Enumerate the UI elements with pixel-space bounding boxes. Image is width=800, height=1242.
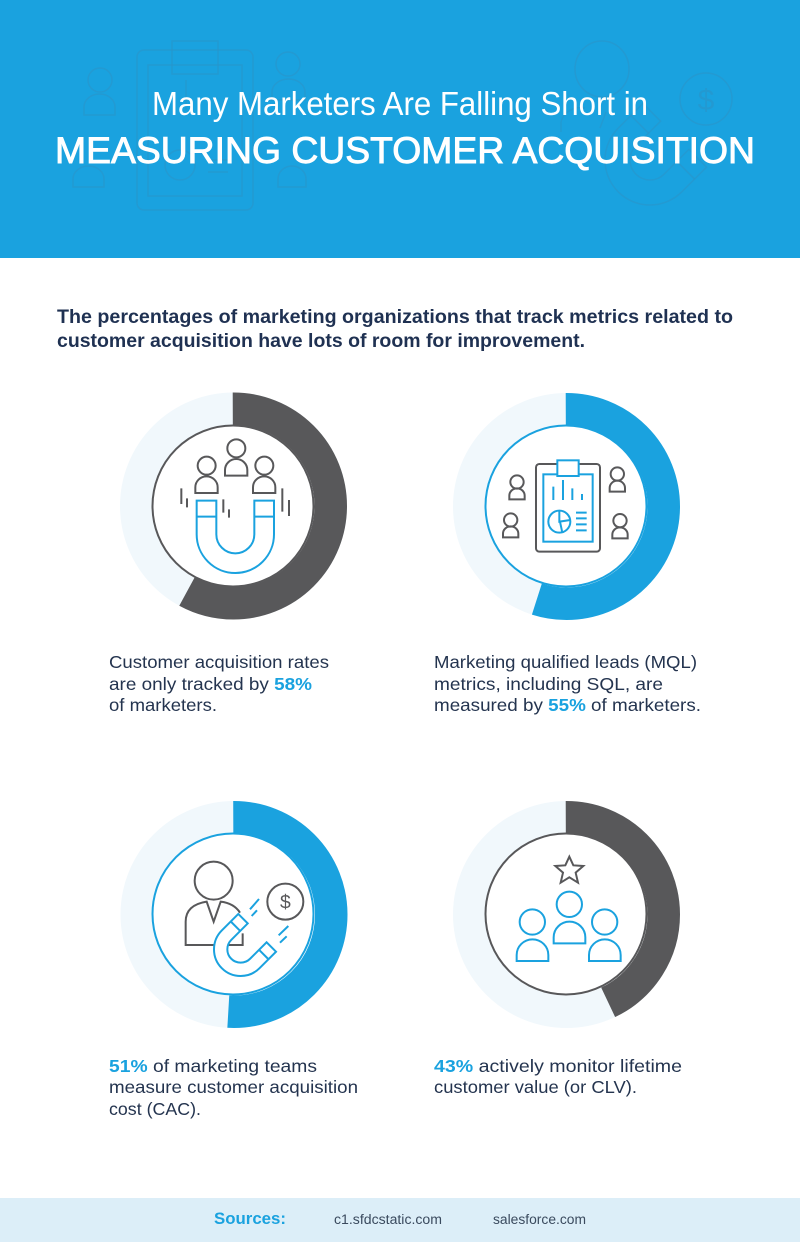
intro text: customer acquisition have lots of room for improvement. (57, 331, 585, 352)
caption: Marketing qualified leads (MQL) (434, 652, 697, 672)
icon: faint header magnet and dollar: $ (698, 84, 715, 117)
caption (109, 652, 329, 715)
icon: star above three people (517, 857, 621, 961)
donut chart 51% (137, 817, 331, 1012)
icon: faint header magnet and dollar (561, 41, 732, 224)
caption: are only tracked by 58% (109, 674, 312, 694)
intro text: The percentages of marketing organizations that track metrics related to (57, 307, 733, 328)
icon: faint header clipboard and people (73, 41, 306, 210)
icon: clipboard report with people (503, 460, 628, 552)
donut chart 58% (136, 409, 331, 603)
caption: measured by 55% of marketers. (434, 695, 701, 715)
caption: measure customer acquisition (109, 1077, 358, 1097)
caption (434, 652, 701, 715)
title line 1: Many Marketers Are Falling Short in (152, 85, 648, 122)
caption: Customer acquisition rates (109, 652, 329, 672)
intro text (57, 307, 733, 352)
panel: header (0, 0, 800, 258)
icon: person, magnet and dollar coin (186, 862, 303, 987)
caption: 43% actively monitor lifetime (434, 1056, 682, 1076)
source 1: c1.sfdcstatic.com (334, 1212, 442, 1227)
caption: metrics, including SQL, are (434, 674, 663, 694)
panel: marketing qualified leads 55% (434, 409, 701, 715)
source 2: salesforce.com (493, 1212, 586, 1227)
donut chart 43% (469, 817, 664, 1012)
caption (434, 1056, 682, 1097)
caption: of marketers. (109, 695, 217, 715)
caption: customer value (or CLV). (434, 1077, 637, 1097)
panel: sources footer (0, 1198, 800, 1242)
icon: magnet attracting people (181, 439, 289, 573)
icon: person, magnet and dollar coin: $ (280, 893, 291, 914)
donut chart 55% (469, 409, 664, 604)
caption (109, 1056, 358, 1119)
panel: customer lifetime value 43% (434, 817, 682, 1097)
caption: cost (CAC). (109, 1099, 201, 1119)
panel: customer acquisition cost 51% (109, 817, 358, 1119)
title line 2: MEASURING CUSTOMER ACQUISITION (55, 130, 755, 171)
sources label: Sources: (214, 1209, 286, 1228)
caption: 51% of marketing teams (109, 1056, 317, 1076)
panel: customer acquisition rates 58% (109, 409, 331, 715)
